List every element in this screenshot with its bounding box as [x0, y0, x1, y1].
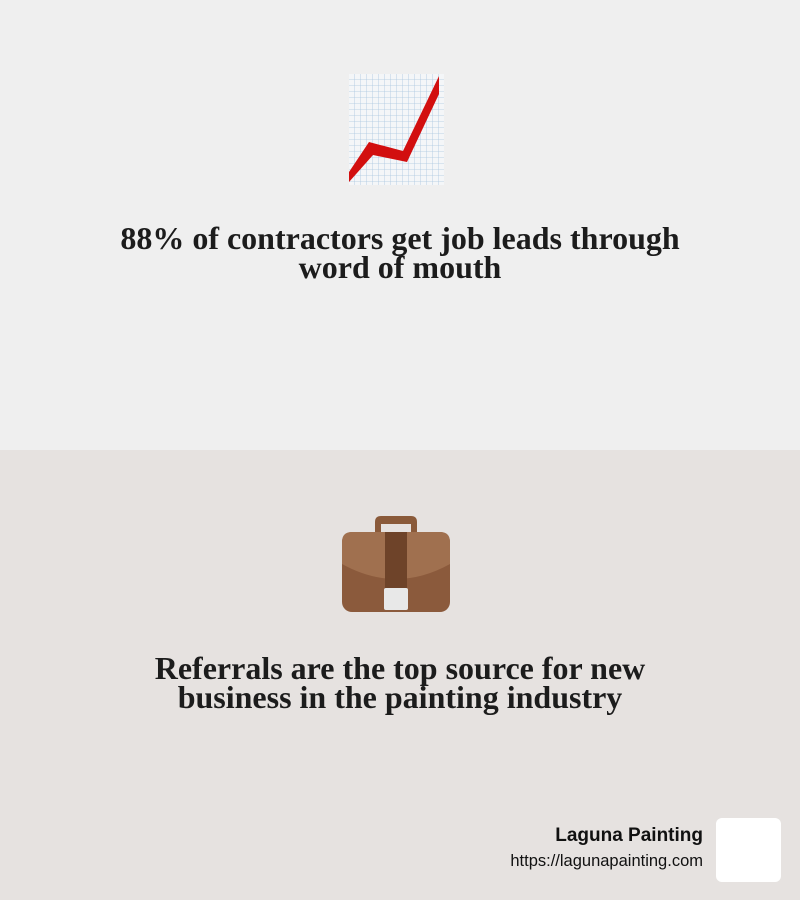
- heading: 88% stat: word of mouth: [299, 249, 501, 285]
- heading: 88% stat: [120, 220, 680, 285]
- icon: chart increasing: [349, 74, 444, 185]
- panel: top stat: [0, 0, 800, 450]
- footer: brand: Laguna Painting: [555, 825, 703, 846]
- heading: 88% stat: 88% of contractors get job leads through: [120, 220, 680, 256]
- logo box: [716, 818, 781, 882]
- panel: bottom stat: [0, 450, 800, 900]
- heading: referrals: Referrals are the top source for new: [155, 650, 645, 686]
- heading: referrals: business in the painting industry: [178, 679, 622, 715]
- footer: brand: [510, 825, 703, 870]
- heading: referrals: [155, 650, 646, 715]
- footer: brand: https://lagunapainting.com: [510, 852, 703, 870]
- icon: briefcase: [342, 516, 450, 612]
